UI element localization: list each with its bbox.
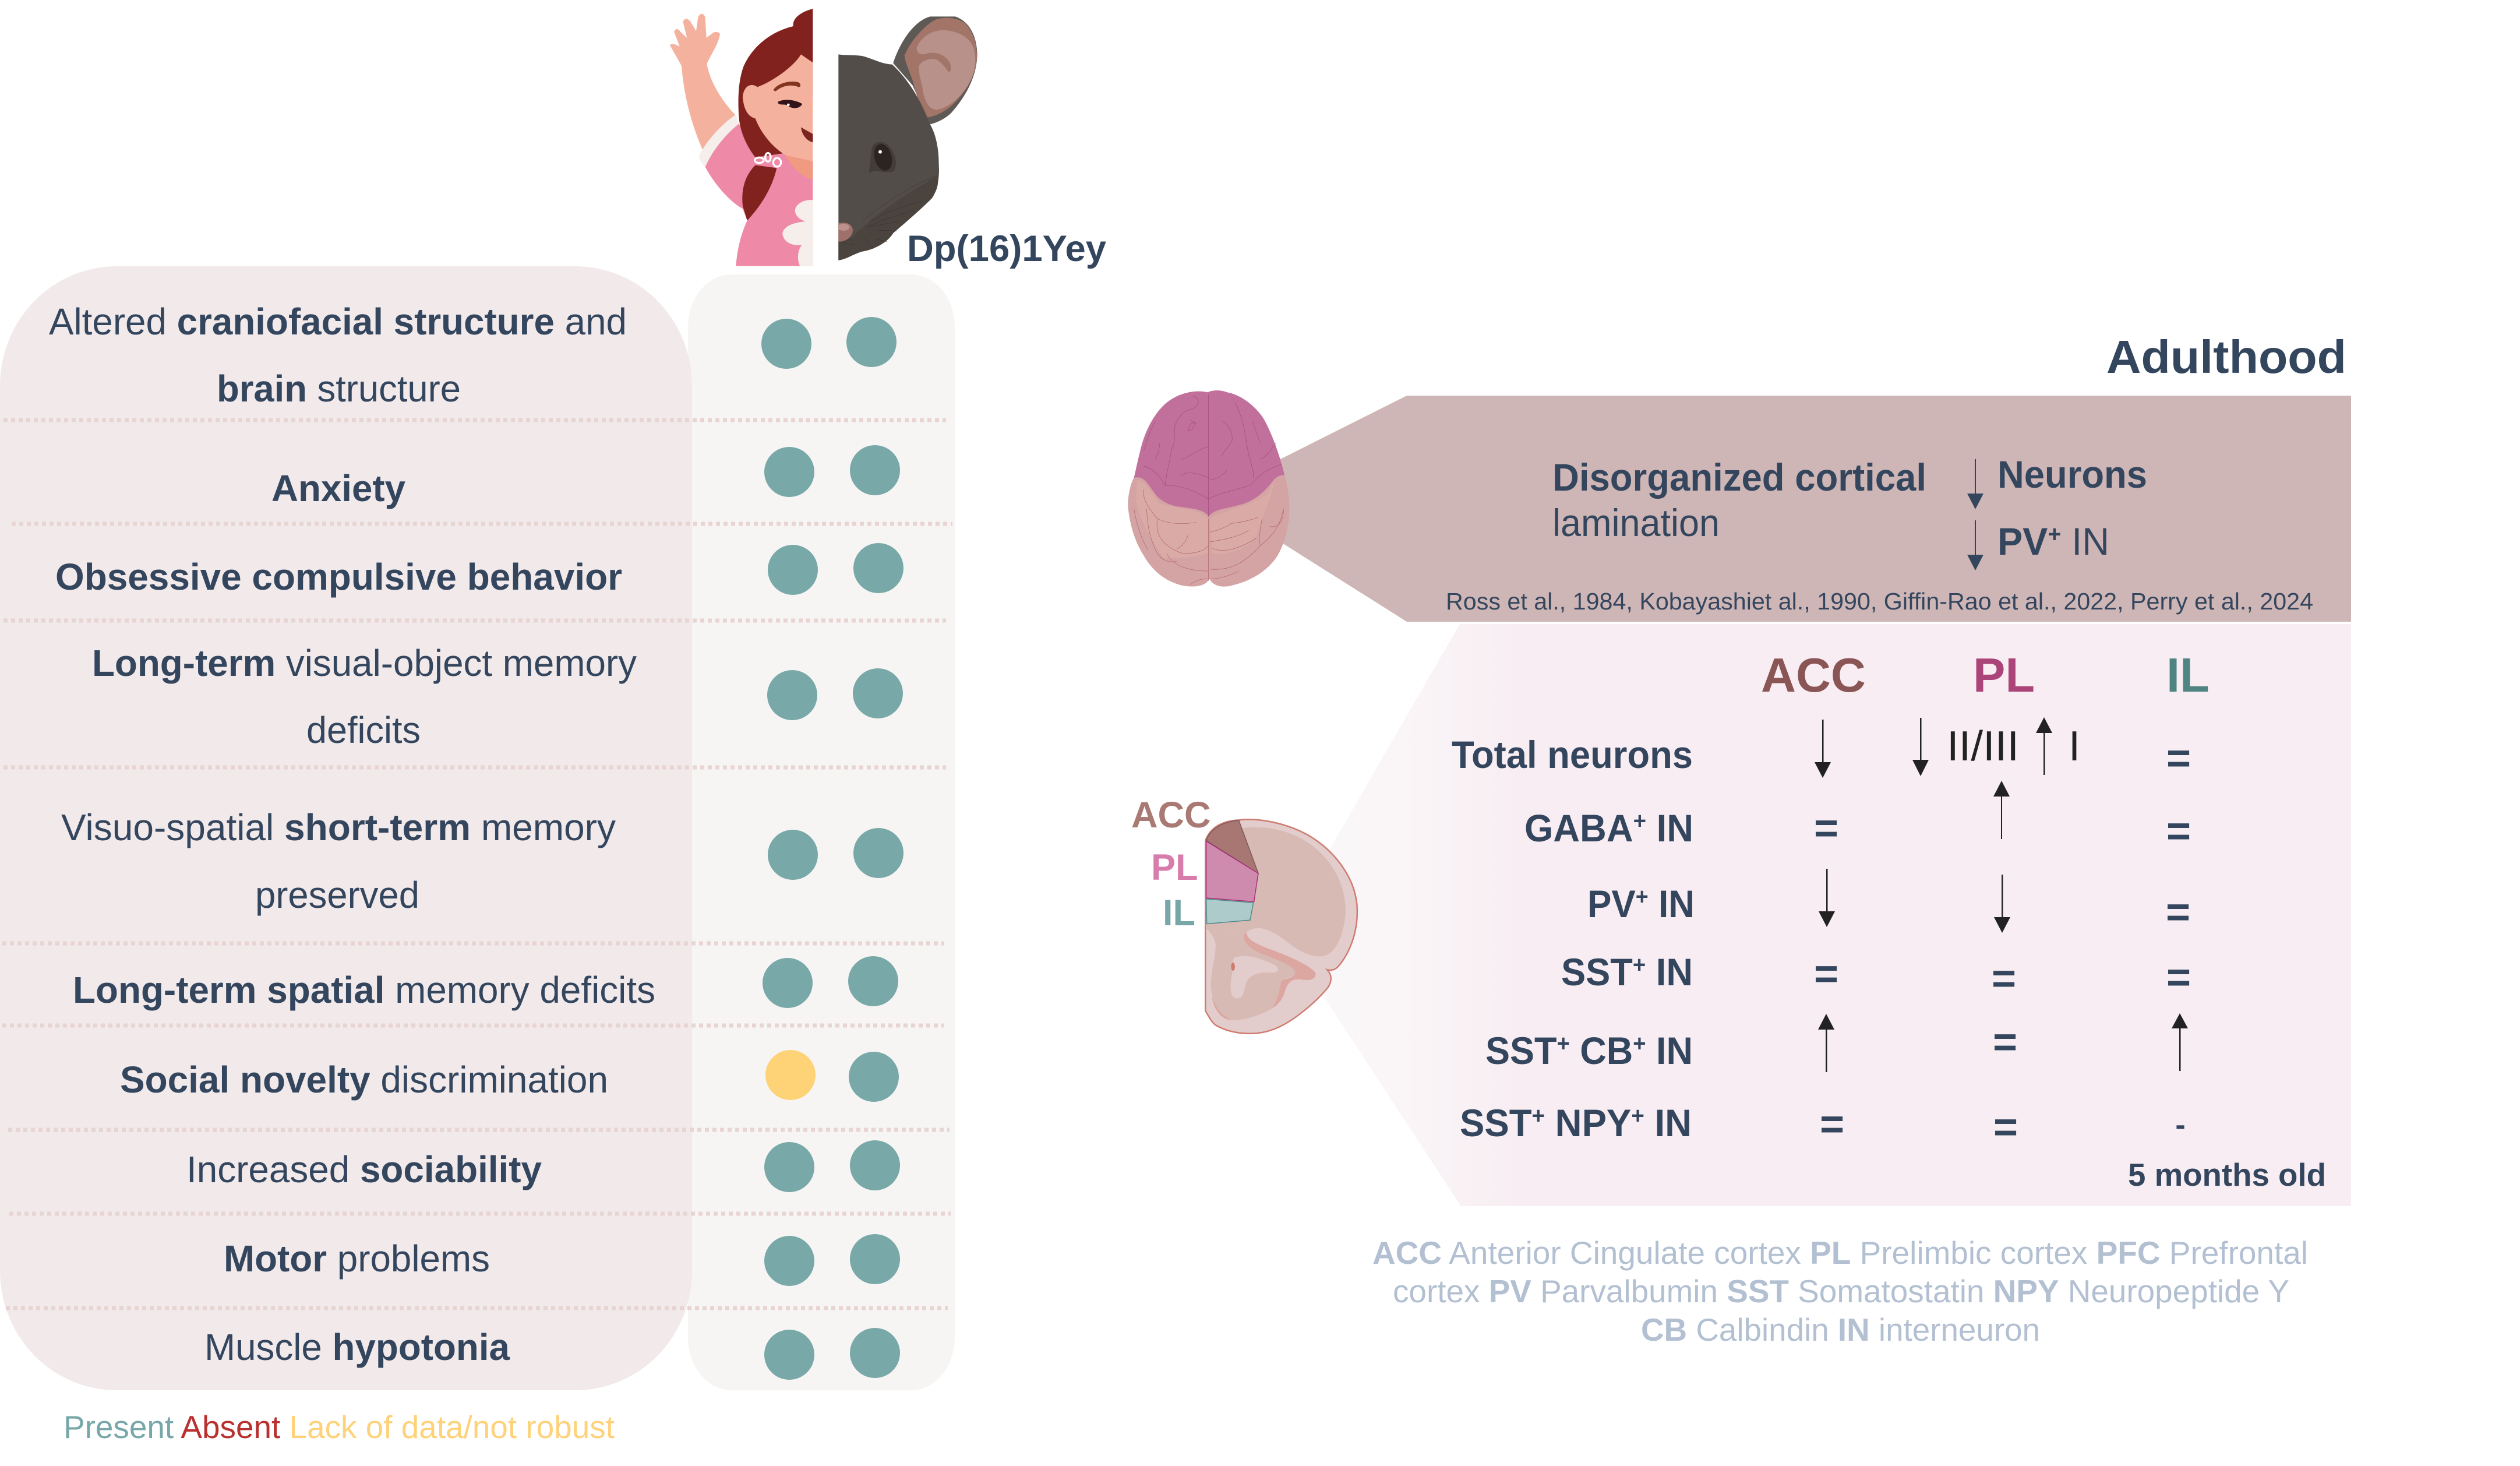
label: PV+ IN: + bbox=[2048, 521, 2061, 547]
illustration: girl half portrait bbox=[670, 9, 813, 266]
text block: phenotype rows: Motor problems bbox=[224, 1238, 490, 1280]
section region labels bbox=[1131, 795, 1210, 933]
table row labels: IN bbox=[1649, 882, 1695, 925]
table headers bbox=[1761, 648, 2210, 702]
table row labels: SST bbox=[1561, 950, 1636, 993]
table row labels: + bbox=[1557, 1031, 1570, 1056]
table: no-change marks: = bbox=[1993, 1019, 2017, 1066]
table row labels: GABA bbox=[1524, 806, 1637, 850]
text block: phenotype rows: deficits bbox=[306, 709, 421, 751]
panel: mouse prefrontal findings band bbox=[1282, 624, 2351, 1206]
illustration: mouse brain section bbox=[1205, 819, 1357, 1034]
text block: phenotype rows bbox=[49, 301, 655, 1368]
section region labels: PL bbox=[1151, 847, 1198, 888]
label: mouse model name: Dp(16)1Yey bbox=[907, 228, 1106, 269]
table headers: IL bbox=[2166, 648, 2210, 702]
text block: phenotype rows: Obsessive compulsive behavior bbox=[55, 556, 622, 598]
abbreviations legend: cortex PV Parvalbumin SST Somatostatin NPY Neuropeptide Y bbox=[1393, 1273, 2289, 1309]
table: no-change marks: = bbox=[1993, 1104, 2018, 1151]
table: no-change marks: - bbox=[2175, 1108, 2186, 1142]
table row labels: + bbox=[1633, 1031, 1646, 1056]
label: neurons: Neurons bbox=[1997, 453, 2147, 496]
text block: phenotype rows: Muscle hypotonia bbox=[204, 1326, 510, 1368]
abbreviations legend: ACC Anterior Cingulate cortex PL Prelimbic cortex PFC Prefrontal bbox=[1372, 1235, 2308, 1271]
text: disorganized lamination bbox=[1552, 456, 1926, 544]
table: no-change marks: = bbox=[2166, 808, 2191, 855]
label: PV+ IN: IN bbox=[2061, 520, 2109, 563]
text block: phenotype rows: brain structure bbox=[217, 368, 461, 410]
table row labels: + bbox=[1636, 884, 1649, 910]
text block: phenotype rows: Visuo-spatial short-term memory bbox=[61, 806, 616, 848]
abbreviations legend bbox=[1372, 1235, 2308, 1348]
heading: Adulthood: Adulthood bbox=[2106, 331, 2346, 383]
illustration: mouse half portrait bbox=[838, 16, 977, 260]
table row labels: + bbox=[1633, 808, 1646, 834]
table row labels: IN bbox=[1646, 1029, 1693, 1072]
table: no-change marks: = bbox=[2166, 954, 2191, 1001]
table row labels: IN bbox=[1646, 950, 1693, 993]
illustration: human brain top view bbox=[1128, 390, 1289, 587]
label: cortical layers: I bbox=[2069, 723, 2080, 770]
table row labels bbox=[1452, 733, 1695, 1144]
table: no-change marks: = bbox=[2166, 735, 2191, 782]
section region labels: IL bbox=[1163, 893, 1195, 933]
table: no-change marks: = bbox=[1992, 956, 2016, 1002]
table row labels: PV bbox=[1587, 882, 1639, 925]
table: no-change marks: = bbox=[2166, 889, 2190, 936]
table row labels: CB bbox=[1570, 1029, 1633, 1072]
arrow: neurons decreased bbox=[1967, 459, 1983, 509]
label: cortical layers bbox=[1947, 723, 2080, 770]
table row labels: + bbox=[1633, 952, 1646, 978]
table row labels: IN bbox=[1646, 806, 1693, 850]
table row labels: IN bbox=[1644, 1101, 1692, 1144]
table: no-change marks bbox=[1814, 735, 2191, 1151]
panel: phenotype list bbox=[0, 266, 692, 1390]
abbreviations legend: CB Calbindin IN interneuron bbox=[1641, 1312, 2040, 1348]
label: PV+ IN: PV bbox=[1997, 520, 2048, 563]
text block: phenotype rows: Increased sociability bbox=[186, 1148, 542, 1190]
table: no-change marks: = bbox=[1820, 1101, 1844, 1148]
table row labels: Total neurons bbox=[1452, 733, 1693, 776]
panel: human cortex findings band bbox=[1276, 396, 2351, 622]
text block: phenotype rows: Anxiety bbox=[271, 467, 405, 509]
legend: dot colours: Present Absent Lack of data/not robust bbox=[63, 1409, 615, 1445]
table: no-change marks: = bbox=[1814, 805, 1838, 852]
text block: phenotype rows: Long-term spatial memory deficits bbox=[73, 969, 655, 1011]
table row labels: + bbox=[1532, 1103, 1545, 1129]
note: age: 5 months old bbox=[2128, 1157, 2326, 1193]
text block: phenotype rows: Long-term visual-object memory bbox=[92, 642, 637, 684]
section region labels: ACC bbox=[1131, 795, 1210, 836]
table row labels: + bbox=[1631, 1103, 1644, 1129]
table headers: PL bbox=[1973, 648, 2035, 702]
row separators bbox=[2, 420, 952, 1308]
table: change arrows bbox=[1815, 717, 2188, 1072]
table headers: ACC bbox=[1761, 648, 1866, 702]
citation: Ross et al., 1984, Kobayashiet al., 1990, Giffin-Rao et al., 2022, Perry et al., 2024 bbox=[1446, 588, 2313, 615]
table row labels: NPY bbox=[1545, 1101, 1631, 1144]
text: disorganized lamination: lamination bbox=[1552, 501, 1720, 544]
table row labels: SST bbox=[1485, 1029, 1560, 1072]
text block: phenotype rows: Altered craniofacial structure and bbox=[49, 301, 627, 343]
dots: human and mouse presence markers bbox=[761, 317, 903, 1380]
arrow: PV interneurons decreased bbox=[1967, 520, 1983, 570]
panel: presence dots column bbox=[688, 274, 955, 1390]
text block: phenotype rows: preserved bbox=[255, 874, 419, 916]
table row labels: SST bbox=[1460, 1101, 1534, 1144]
label: cortical layers: II/III bbox=[1947, 723, 2019, 770]
text: disorganized lamination: Disorganized cortical bbox=[1552, 456, 1926, 499]
table: no-change marks: = bbox=[1814, 951, 1838, 998]
text block: phenotype rows: Social novelty discrimination bbox=[120, 1059, 608, 1101]
